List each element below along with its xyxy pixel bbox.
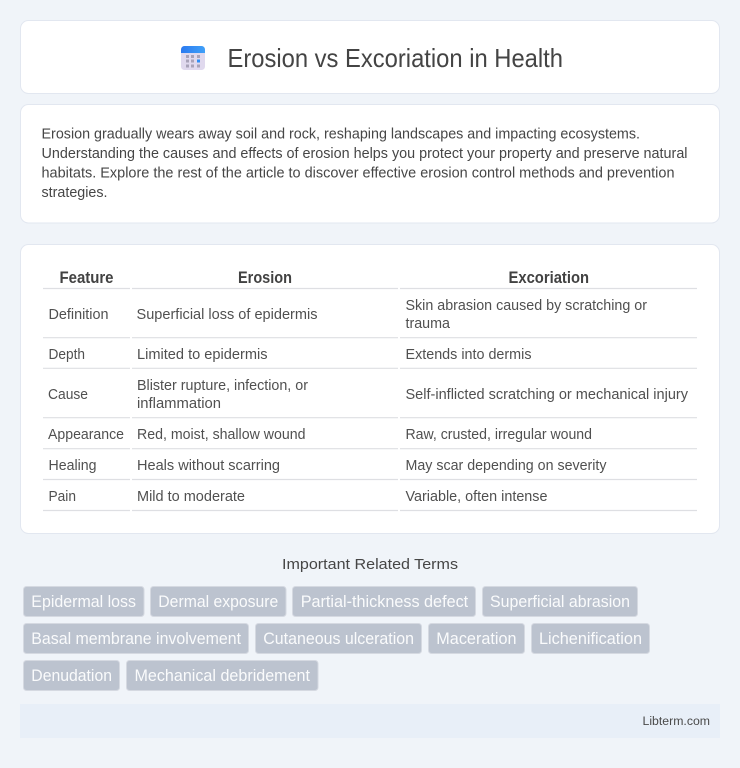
tag: cutaneous ulceration: Cutaneous ulceration bbox=[263, 629, 414, 648]
row: cause: Cause bbox=[48, 387, 88, 403]
row: appearance: Raw, crusted, irregular wound bbox=[406, 427, 592, 443]
footer bbox=[20, 704, 720, 738]
table header row: Excoriation bbox=[508, 269, 589, 287]
icon: calendar bbox=[181, 46, 205, 70]
panel: related term tags bbox=[24, 586, 650, 690]
row: healing: May scar depending on severity bbox=[406, 458, 607, 474]
tag: denudation bbox=[24, 660, 120, 690]
table header row bbox=[60, 269, 589, 287]
tag: partial-thickness defect bbox=[292, 586, 476, 616]
footer source link: Libterm.com bbox=[642, 714, 710, 728]
row: pain bbox=[48, 489, 548, 505]
row: definition bbox=[48, 298, 647, 332]
row: cause: Blister rupture, infection, or bbox=[137, 378, 308, 394]
row: depth: Depth bbox=[48, 347, 85, 363]
row: pain: Mild to moderate bbox=[137, 489, 245, 505]
row: definition: Skin abrasion caused by scratching or bbox=[406, 298, 647, 314]
intro text: habitats. Explore the rest of the article to discover effective erosion control methods and prevention bbox=[42, 164, 674, 182]
tag: dermal exposure bbox=[150, 586, 286, 616]
row: depth bbox=[48, 347, 532, 363]
row: depth: Extends into dermis bbox=[406, 347, 532, 363]
table header row: Erosion bbox=[238, 269, 292, 287]
tag: basal membrane involvement: Basal membrane involvement bbox=[31, 629, 241, 648]
intro text: Erosion gradually wears away soil and rock, reshaping landscapes and impacting ecosystems. bbox=[42, 126, 640, 142]
row: appearance: Appearance bbox=[48, 427, 124, 443]
title: Erosion vs Excoriation in Health bbox=[228, 43, 563, 73]
tag: partial-thickness defect: Partial-thickness defect bbox=[301, 592, 469, 611]
row: appearance bbox=[48, 427, 592, 443]
row: depth: Limited to epidermis bbox=[137, 347, 268, 363]
row: cause: Self-inflicted scratching or mechanical injury bbox=[406, 387, 689, 403]
row: healing: Heals without scarring bbox=[137, 458, 280, 474]
tag: epidermal loss bbox=[24, 586, 144, 616]
tag: lichenification bbox=[532, 624, 650, 654]
tag: mechanical debridement: Mechanical debridement bbox=[134, 666, 310, 685]
tag: cutaneous ulceration bbox=[256, 624, 422, 654]
row: appearance: Red, moist, shallow wound bbox=[137, 427, 306, 443]
tag: denudation: Denudation bbox=[31, 666, 112, 685]
table header row: Feature bbox=[60, 269, 114, 287]
row: definition: trauma bbox=[406, 316, 451, 332]
tag: superficial abrasion bbox=[482, 586, 638, 616]
panel: introduction bbox=[20, 104, 720, 223]
tag: mechanical debridement bbox=[126, 660, 318, 690]
row: definition: Definition bbox=[48, 307, 108, 323]
tag: lichenification: Lichenification bbox=[539, 629, 642, 648]
tag: maceration bbox=[428, 624, 524, 654]
row: pain: Pain bbox=[48, 489, 76, 505]
row: definition: Superficial loss of epidermis bbox=[136, 307, 318, 323]
intro text bbox=[42, 126, 688, 201]
row: healing bbox=[48, 458, 607, 474]
panel: comparison table bbox=[20, 244, 720, 534]
row: cause: inflammation bbox=[137, 396, 221, 412]
tag: maceration: Maceration bbox=[436, 629, 516, 648]
intro text: strategies. bbox=[42, 184, 108, 201]
tag: basal membrane involvement bbox=[24, 624, 248, 654]
tag: epidermal loss: Epidermal loss bbox=[31, 592, 136, 611]
tag: dermal exposure: Dermal exposure bbox=[158, 592, 278, 611]
row: healing: Healing bbox=[48, 458, 96, 474]
row: pain: Variable, often intense bbox=[406, 489, 548, 505]
panel: header bbox=[20, 20, 720, 94]
heading: important related terms: Important Related Terms bbox=[282, 556, 458, 573]
row: cause bbox=[48, 378, 689, 412]
tag: superficial abrasion: Superficial abrasion bbox=[490, 592, 630, 611]
intro text: Understanding the causes and effects of erosion helps you protect your property and preserve natural bbox=[42, 145, 688, 162]
